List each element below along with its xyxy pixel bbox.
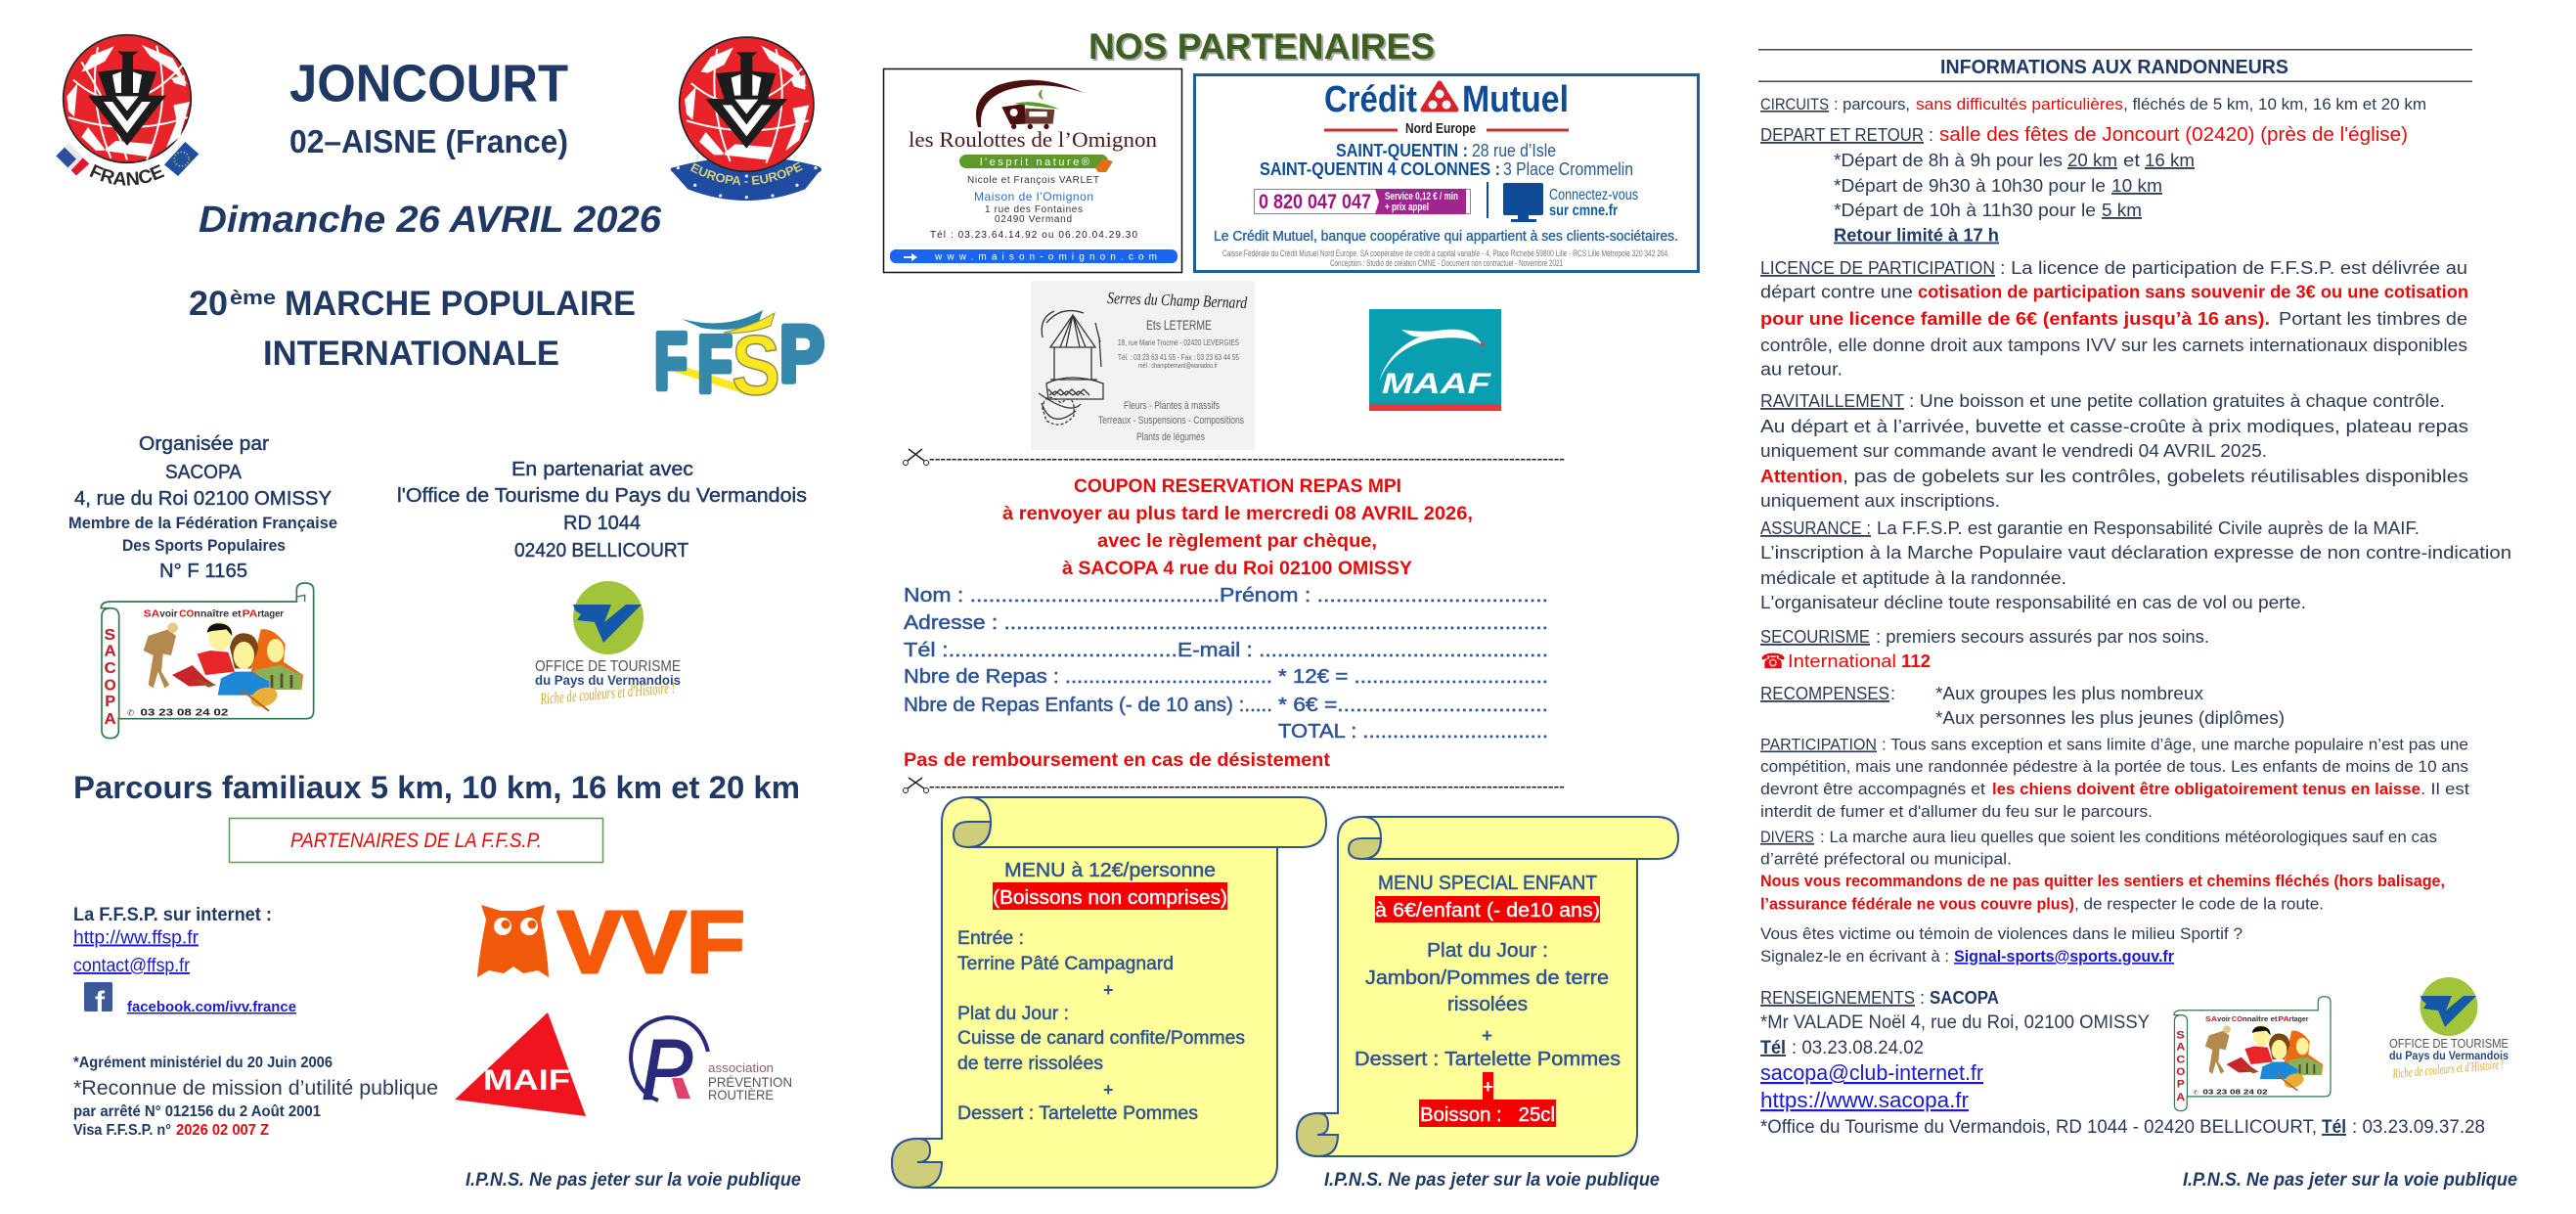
text block: start and return: *Départ de 10h à 11h30 pour le: [1834, 200, 2096, 220]
card: Serres du Champ Bernard: Serres du Champ Bernard: [1107, 289, 1248, 312]
panel: child menu scroll: MENU SPECIAL ENFANT: [1378, 873, 1597, 894]
icon: FFSP logo: [654, 310, 824, 413]
text block: start and return: DEPART ET RETOUR: [1760, 125, 1924, 145]
text block: start and return: 20 km: [2067, 150, 2117, 170]
text block: participation: devront être accompagnés et: [1760, 781, 1985, 798]
text block: FFSP online: La F.F.S.P. sur internet :: [73, 905, 272, 925]
text block: organiser: Organisée par: [139, 433, 269, 455]
text block: approvals: *Reconnue de mission d’utilité publique: [73, 1077, 438, 1100]
text block: tourist office partner: RD 1044: [563, 513, 641, 534]
card: Serres du Champ Bernard: Plants de légumes: [1136, 431, 1205, 443]
text block: start and return: 16 km: [2145, 150, 2195, 170]
form: coupon fields: Tél :....................................: [904, 640, 1177, 661]
text block: miscellaneous: [1760, 829, 2445, 914]
text block: insurance: ASSURANCE :: [1760, 518, 1871, 538]
text block: coupon heading: avec le règlement par chèque,: [1097, 531, 1377, 552]
card: Serres du Champ Bernard: Terreaux - Suspensions - Compositions: [1098, 415, 1244, 427]
text block: contact details: sacopa@club-internet.fr: [1760, 1060, 1983, 1085]
text block: insurance: L'organisateur décline toute responsabilité en cas de vol ou perte.: [1760, 593, 2306, 612]
icon: SACOPA logo: A: [105, 711, 116, 728]
text block: refreshments: Au départ et à l’arrivée, buvette et casse-croûte à prix modiques, plateau repas: [1760, 417, 2468, 436]
text block: tourist office partner: En partenariat avec: [511, 459, 693, 480]
icon: IVV Europe logo: EUROPA - EUROPE: [690, 162, 803, 186]
text block: start and return: [1760, 123, 2408, 245]
icon: small SACOPA logo: S: [2176, 1029, 2185, 1041]
panel: child menu scroll: Jambon/Pommes de terre: [1365, 967, 1609, 989]
text block: approvals: [73, 1055, 438, 1139]
icon: facebook: [84, 982, 112, 1018]
text block: organiser: Membre de la Fédération Française: [68, 514, 337, 532]
icon: scissors cut line bottom: ------------------------------------------------------------------------------------------------------------------: [929, 779, 1565, 793]
icon: gazebo sketch: [1039, 311, 1103, 425]
text block: refreshments: uniquement sur commande avant le vendredi 04 AVRIL 2025.: [1760, 441, 2267, 461]
card: Crédit Mutuel: Connectez-vous: [1549, 187, 1638, 203]
card: Les Roulottes de l'Omignon: les Roulottes de l’Omignon: [909, 127, 1157, 152]
text block: refreshments: RAVITAILLEMENT: [1760, 391, 1904, 411]
text block: participation: . Il est: [2421, 781, 2469, 798]
text block: first aid: [1760, 627, 2209, 673]
icon: small Office de Tourisme logo: OFFICE DE TOURISME: [2389, 1036, 2509, 1051]
text block: approvals: 2026 02 007 Z: [176, 1122, 269, 1139]
text block: participation: les chiens doivent être obligatoirement tenus en laisse: [1992, 781, 2421, 798]
icon: small Office de Tourisme logo: [2389, 977, 2509, 1082]
text block: violence reporting: Signal-sports@sports.gouv.fr: [1954, 948, 2175, 966]
card: Crédit Mutuel: Mutuel: [1462, 79, 1569, 120]
heading: our partners: NOS PARTENAIRES: [1090, 28, 1437, 68]
panel: child menu scroll: rissolées: [1447, 994, 1528, 1015]
text block: refreshments: [1760, 391, 2468, 511]
icon: small SACOPA logo: rtager: [2289, 1015, 2309, 1023]
text block: refreshments: , pas de gobelets sur les contrôles, gobelets réutilisables disponibles: [1843, 467, 2468, 486]
text block: insurance: [1760, 518, 2511, 612]
text block: participation licence: [1760, 258, 2468, 380]
card: Crédit Mutuel: Conception : Studio de création CMNE - Document non contractuel - Novembre 2021: [1330, 258, 1563, 268]
form: coupon fields: Prénom : .....................................: [1220, 585, 1548, 607]
card: Crédit Mutuel: Crédit: [1324, 79, 1417, 120]
text block: participation licence: LICENCE DE PARTICIPATION: [1760, 258, 1995, 278]
text block: FFSP online: http://ww.ffsp.fr: [73, 927, 200, 949]
icon: small SACOPA logo: ✆: [2194, 1089, 2198, 1096]
form: coupon fields: Adresse : ........................................................................................: [904, 612, 1548, 634]
card: Les Roulottes de l'Omignon: Nicole et François VARLET: [967, 175, 1099, 186]
text block: contact details: *Office du Tourisme du Vermandois, RD 1044 - 02420 BELLICOURT,: [1760, 1117, 2317, 1138]
card: Crédit Mutuel: Caisse Fédérale du Crédit Mutuel Nord Europe, SA coopérative de crédit à capital variable - 4, Place Richebé 59800 Lille - RCS Lille Métropole 320 342 264.: [1222, 248, 1669, 258]
text block: coupon heading: à SACOPA 4 rue du Roi 02100 OMISSY: [1062, 559, 1412, 579]
text block: start and return: 5 km: [2102, 200, 2142, 220]
icon: SACOPA logo: rtager: [257, 609, 284, 620]
text block: rewards: :: [1890, 684, 1895, 703]
heading: information: INFORMATIONS AUX RANDONNEURS: [1940, 57, 2288, 78]
card: Les Roulottes de l'Omignon: www.maison-omignon.com: [934, 252, 1157, 262]
text block: contact details: *Mr VALADE Noël 4, rue du Roi, 02100 OMISSY: [1760, 1012, 2150, 1033]
icon: Prévention Routière logo: P: [642, 1023, 692, 1117]
text block: miscellaneous: , de respecter le code de la route.: [2074, 896, 2324, 914]
heading: event name: INTERNATIONALE: [263, 335, 559, 373]
text block: rewards: *Aux personnes les plus jeunes (diplômes): [1935, 708, 2285, 728]
panel: adult menu scroll: [892, 797, 1326, 1188]
icon: IVV France logo: FRANCE: [90, 164, 164, 186]
icon: MAIF logo: MAIF: [483, 1064, 570, 1097]
text block: coupon heading: COUPON RESERVATION REPAS MPI: [1074, 476, 1401, 497]
text block: participation licence: pour une licence famille de 6€ (enfants jusqu’à 16 ans).: [1760, 308, 2270, 329]
text block: participation: interdit de fumer et d'allumer du feu sur le parcours.: [1760, 803, 2153, 821]
card: Serres du Champ Bernard: Tél. : 03 23 63 41 55 - Fax : 03 23 63 44 55: [1118, 353, 1239, 362]
text block: start and return: 10 km: [2111, 175, 2162, 196]
icon: small SACOPA logo: O: [2176, 1066, 2185, 1078]
icon: Office de Tourisme logo: Riche de couleurs et d'Histoire !: [539, 678, 676, 708]
text block: start and return: *Départ de 8h à 9h pour les: [1834, 150, 2063, 170]
text block: rewards: *Aux groupes les plus nombreux: [1935, 684, 2203, 703]
callout: FFSP partners: PARTENAIRES DE LA F.F.S.P.: [290, 830, 542, 852]
icon: Crédit Mutuel triangle: [1423, 83, 1456, 110]
text block: start and return: Retour limité à 17 h: [1834, 225, 1999, 245]
panel: adult menu scroll: (Boissons non comprises): [993, 887, 1227, 909]
icon: VVF logo: VVF: [557, 894, 745, 992]
text block: start and return: salle des fêtes de Joncourt (02420) (près de l'église): [1939, 123, 2408, 146]
panel: child menu scroll: +: [1483, 1077, 1493, 1097]
icon: scissors cut line top: [904, 449, 1565, 466]
heading: event name: ème: [230, 288, 276, 309]
icon: small Office de Tourisme logo: Riche de couleurs et d'Histoire !: [2391, 1057, 2505, 1082]
icon: FFSP logo: F: [697, 320, 733, 409]
footer note: left: I.P.N.S. Ne pas jeter sur la voie publique: [466, 1170, 801, 1191]
icon: SACOPA logo: ✆: [127, 707, 134, 717]
icon: FFSP logo: S: [732, 319, 780, 413]
icon: SACOPA logo: A: [105, 644, 116, 660]
text block: tourist office partner: l'Office de Tourisme du Pays du Vermandois: [397, 485, 807, 507]
card: Crédit Mutuel: Service 0,12 € / min: [1385, 191, 1458, 202]
text block: circuits: CIRCUITS: [1760, 96, 1829, 113]
footer note: right: I.P.N.S. Ne pas jeter sur la voie publique: [2183, 1170, 2517, 1191]
text block: miscellaneous: : La marche aura lieu quelles que soient les conditions météorologiques sauf en cas: [1820, 829, 2437, 846]
icon: Prévention Routière logo: association: [708, 1060, 774, 1075]
text block: contact details: Tél: [1760, 1038, 1786, 1058]
icon: small SACOPA logo: SA: [2205, 1015, 2217, 1023]
card: Serres du Champ Bernard: Ets LETERME: [1146, 317, 1212, 333]
card: Crédit Mutuel: 0 820 047 047: [1259, 191, 1371, 213]
text block: violence reporting: Signalez-le en écrivant à :: [1760, 948, 1949, 966]
panel: child menu scroll: [1297, 817, 1678, 1156]
text block: rewards: RECOMPENSES: [1760, 684, 1889, 703]
text block: start and return: et: [2123, 150, 2140, 170]
text block: miscellaneous: l’assurance fédérale ne vous couvre plus): [1760, 896, 2074, 914]
text block: refreshments: uniquement aux inscriptions.: [1760, 491, 2000, 511]
text block: organiser: Des Sports Populaires: [122, 536, 286, 555]
card: Les Roulottes de l'Omignon: l'esprit nature®: [980, 157, 1089, 168]
subtitle: department: 02–AISNE (France): [289, 123, 568, 159]
text block: violence reporting: [1760, 925, 2243, 966]
icon: small SACOPA logo: [2174, 997, 2331, 1111]
icon: small SACOPA logo: A: [2176, 1042, 2185, 1054]
text block: approvals: par arrêté N° 012156 du 2 Août 2001: [73, 1103, 321, 1120]
panel: adult menu scroll: Entrée :: [957, 928, 1024, 949]
icon: Office de Tourisme logo: [535, 581, 681, 708]
icon: VVF logo: [477, 894, 745, 992]
icon: Prévention Routière logo: [631, 1017, 792, 1117]
panel: walker information: [1758, 49, 2517, 1191]
panel: child menu scroll: Dessert : Tartelette Pommes: [1355, 1049, 1621, 1070]
panel: adult menu scroll: Plat du Jour :: [957, 1004, 1069, 1024]
icon: small SACOPA logo: A: [2176, 1092, 2185, 1103]
text block: FFSP online: [73, 905, 296, 1018]
text block: circuits: sans difficultés particulières: [1916, 96, 2123, 113]
icon: SACOPA logo: voir: [159, 609, 178, 620]
icon: butterfly: [1095, 158, 1113, 172]
icon: facebook: f: [95, 986, 106, 1018]
text block: participation licence: : La licence de participation de F.F.S.P. est délivrée au: [2000, 258, 2467, 278]
text block: miscellaneous: Nous vous recommandons de ne pas quitter les sentiers et chemins fléchés (hors balisage,: [1760, 873, 2445, 890]
icon: Office de Tourisme logo: OFFICE DE TOURISME: [535, 658, 681, 675]
text block: insurance: L’inscription à la Marche Populaire vaut déclaration expresse de non contre-indication: [1760, 543, 2511, 562]
text block: first aid: : premiers secours assurés par nos soins.: [1876, 627, 2209, 647]
callout: FFSP partners: [229, 818, 602, 863]
icon: MAAF logo: MAAF: [1382, 368, 1491, 400]
panel: adult menu scroll: MENU à 12€/personne: [1004, 860, 1216, 881]
icon: small SACOPA logo: PA: [2278, 1015, 2289, 1023]
card: Crédit Mutuel: sur cmne.fr: [1549, 202, 1618, 219]
text block: violence reporting: Vous êtes victime ou témoin de violences dans le milieu Sportif ?: [1760, 925, 2243, 943]
icon: SACOPA logo: nnaître et: [194, 609, 243, 620]
icon: Prévention Routière logo: PRÉVENTION: [708, 1074, 792, 1090]
card: Crédit Mutuel: SAINT-QUENTIN :: [1336, 141, 1468, 160]
icon: Office de Tourisme logo: du Pays du Vermandois: [535, 672, 681, 688]
panel: adult menu scroll: Terrine Pâté Campagnard: [957, 954, 1174, 974]
card: Crédit Mutuel: 28 rue d’Isle: [1472, 141, 1556, 160]
title: Joncourt: JONCOURT: [289, 55, 568, 113]
text block: contact details: Tél: [2322, 1117, 2346, 1138]
card: Crédit Mutuel: [1195, 74, 1698, 272]
card: Serres du Champ Bernard: Fleurs - Plantes à massifs: [1124, 400, 1220, 412]
text block: participation: [1760, 736, 2469, 821]
text block: contact details: [1760, 988, 2485, 1138]
footer note: middle: I.P.N.S. Ne pas jeter sur la voie publique: [1324, 1170, 1660, 1191]
icon: IVV France logo: [56, 33, 200, 186]
text block: participation licence: cotisation de participation sans souvenir de 3€ ou une cotisation: [1918, 282, 2468, 301]
icon: gypsy caravan: [976, 80, 1084, 129]
text block: coupon heading: [1002, 476, 1473, 579]
card: Les Roulottes de l'Omignon: 02490 Vermand: [995, 214, 1072, 225]
icon: small Office de Tourisme logo: du Pays du Vermandois: [2389, 1051, 2509, 1062]
panel: adult menu scroll: de terre rissolées: [957, 1054, 1103, 1074]
text block: participation licence: départ contre une: [1760, 282, 1913, 301]
icon: SACOPA logo: CO: [179, 609, 195, 620]
form: coupon fields: Nbre de Repas : ...................................: [904, 666, 1272, 688]
text block: approvals: Visa F.F.S.P. n°: [73, 1122, 171, 1139]
icon: telephone: ☎: [1760, 650, 1786, 673]
icon: SACOPA logo: P: [105, 694, 115, 710]
text block: contact details: : 03.23.09.37.28: [2352, 1117, 2485, 1138]
icon: SACOPA logo: 03 23 08 24 02: [140, 708, 229, 719]
text block: tourist office partner: 02420 BELLICOURT: [514, 540, 688, 562]
form: coupon fields: E-mail : ...............................................: [1177, 640, 1548, 661]
heading: event name: MARCHE POPULAIRE: [285, 285, 636, 323]
form: coupon fields: [904, 585, 1548, 742]
text block: insurance: La F.F.S.P. est garantie en Responsabilité Civile auprès de la MAIF.: [1877, 518, 2420, 538]
card: Crédit Mutuel: 3 Place Crommelin: [1503, 159, 1633, 179]
text block: contact details: SACOPA: [1930, 988, 1999, 1008]
note: no refund: Pas de remboursement en cas de désistement: [904, 750, 1331, 771]
card: Les Roulottes de l'Omignon: 1 rue des Fontaines: [985, 204, 1083, 215]
text block: organiser: N° F 1165: [159, 561, 247, 582]
icon: MAIF logo: [455, 1012, 586, 1116]
text block: participation licence: au retour.: [1760, 360, 1843, 380]
text block: contact details: RENSEIGNEMENTS: [1760, 988, 1915, 1008]
text block: circuits: , fléchés de 5 km, 10 km, 16 km et 20 km: [2123, 96, 2426, 113]
text block: organiser: 4, rue du Roi 02100 OMISSY: [74, 488, 332, 510]
card: Crédit Mutuel: + prix appel: [1385, 202, 1429, 213]
panel: partners and meal coupon: [884, 26, 1698, 1191]
text block: approvals: *Agrément ministériel du 20 Juin 2006: [73, 1055, 333, 1071]
card: Crédit Mutuel: Le Crédit Mutuel, banque coopérative qui appartient à ses clients-sociétaires.: [1214, 228, 1678, 245]
text block: organiser: SACOPA: [165, 462, 243, 483]
panel: adult menu scroll: +: [1103, 980, 1114, 1000]
text block: start and return: *Départ de 9h30 à 10h30 pour le: [1834, 175, 2106, 196]
icon: FFSP logo: P: [779, 310, 824, 399]
text block: tourist office partner: [397, 459, 807, 562]
icon: small SACOPA logo: C: [2176, 1054, 2185, 1065]
text block: rewards: [1760, 684, 2285, 728]
icon: small SACOPA logo: nnaître et: [2243, 1015, 2278, 1023]
text block: participation: compétition, mais une randonnée pédestre à la portée de tous. Les enfants de moins de 10 ans: [1760, 758, 2468, 776]
form: coupon fields: * 6€ =..................................: [1278, 695, 1548, 716]
text block: contact details: : 03.23.08.24.02: [1792, 1038, 1924, 1058]
icon: SACOPA logo: O: [105, 677, 116, 694]
card: Les Roulottes de l'Omignon: Maison de l’Omignon: [974, 190, 1093, 203]
text block: circuits: : parcours,: [1834, 96, 1910, 113]
icon: small SACOPA logo: voir: [2217, 1015, 2231, 1023]
icon: SACOPA logo: S: [105, 627, 115, 644]
form: coupon fields: Nbre de Repas Enfants (- de 10 ans) :.....: [904, 695, 1272, 716]
text block: participation: PARTICIPATION: [1760, 736, 1877, 753]
icon: MAAF logo: [1369, 309, 1501, 411]
panel: child menu scroll: Boisson : 25cl: [1420, 1104, 1555, 1126]
icon: SACOPA logo: C: [105, 660, 116, 677]
icon: SACOPA logo: PA: [243, 609, 257, 620]
form: coupon fields: * 12€ = ................................: [1278, 666, 1548, 688]
icon: SACOPA logo: [101, 583, 314, 739]
icon: scissors cut line top: ------------------------------------------------------------------------------------------------------------------: [929, 451, 1565, 466]
text block: participation licence: contrôle, elle donne droit aux tampons IVV sur les carnets internationaux disponibles: [1760, 336, 2467, 355]
icon: Prévention Routière logo: ROUTIÈRE: [708, 1087, 774, 1102]
text block: FFSP online: contact@ffsp.fr: [73, 956, 191, 976]
panel: child menu scroll: à 6€/enfant (- de10 ans): [1375, 900, 1600, 922]
text block: contact details: https://www.sacopa.fr: [1760, 1088, 1969, 1112]
text block: first aid: SECOURISME: [1760, 627, 1870, 647]
text block: coupon heading: à renvoyer au plus tard le mercredi 08 AVRIL 2026,: [1002, 504, 1473, 524]
icon: FFSP logo: F: [654, 317, 688, 406]
heading: event name: [189, 285, 636, 373]
date: Dimanche 26 AVRIL 2026: [199, 200, 662, 241]
text block: first aid: International: [1788, 652, 1896, 671]
text block: start and return: :: [1929, 125, 1933, 145]
icon: small SACOPA logo: 03 23 08 24 02: [2202, 1088, 2268, 1097]
heading: event name: 20: [189, 285, 228, 323]
card: Crédit Mutuel: Nord Europe: [1405, 120, 1476, 137]
card: Serres du Champ Bernard: 18, rue Marie Trocmé - 02420 LEVERGIES: [1118, 338, 1239, 347]
icon: small SACOPA logo: P: [2177, 1079, 2185, 1091]
icon: small SACOPA logo: CO: [2232, 1015, 2243, 1023]
card: Les Roulottes de l'Omignon: Tél : 03.23.64.14.92 ou 06.20.04.29.30: [930, 230, 1137, 241]
form: coupon fields: Nom : ........................................: [904, 585, 1220, 607]
panel: left event information: [56, 33, 825, 1191]
card: Les Roulottes de l'Omignon: [884, 68, 1181, 272]
panel: adult menu scroll: Dessert : Tartelette Pommes: [957, 1103, 1198, 1124]
text block: refreshments: : Une boisson et une petite collation gratuites à chaque contrôle.: [1909, 391, 2445, 411]
text block: participation: : Tous sans exception et sans limite d’âge, une marche populaire n’est pas une: [1882, 736, 2468, 753]
panel: child menu scroll: Plat du Jour :: [1427, 940, 1548, 962]
text block: participation licence: Portant les timbres de: [2279, 309, 2467, 329]
icon: IVV Europe logo: [671, 36, 822, 201]
panel: child menu scroll: +: [1482, 1026, 1492, 1047]
card: Serres du Champ Bernard: [1031, 281, 1255, 450]
text block: contact details: :: [1920, 988, 1925, 1008]
card: Crédit Mutuel: SAINT-QUENTIN 4 COLONNES :: [1260, 159, 1500, 179]
text block: circuits: [1760, 96, 2426, 113]
text block: refreshments: Attention: [1760, 467, 1843, 486]
text block: miscellaneous: DIVERS: [1760, 829, 1814, 846]
text block: miscellaneous: d’arrêté préfectoral ou municipal.: [1760, 851, 2012, 869]
form: coupon fields: TOTAL : ...............................: [1278, 721, 1548, 742]
text block: insurance: médicale et aptitude à la randonnée.: [1760, 568, 2066, 588]
card: Serres du Champ Bernard: mél : champbernard@wanadoo.fr: [1138, 363, 1219, 370]
heading: routes: Parcours familiaux 5 km, 10 km, 16 km et 20 km: [73, 770, 800, 805]
text block: first aid: 112: [1901, 652, 1931, 671]
icon: monitor: [1503, 183, 1543, 222]
icon: SACOPA logo: SA: [144, 609, 159, 620]
panel: adult menu scroll: +: [1103, 1080, 1114, 1100]
icon: scissors cut line bottom: [904, 778, 1565, 793]
panel: adult menu scroll: Cuisse de canard confite/Pommes: [957, 1028, 1245, 1049]
heading: our partners: NOS PARTENAIRES: [1088, 26, 1435, 67]
text block: organiser: [68, 433, 337, 582]
text block: FFSP online: facebook.com/ivv.france: [127, 999, 296, 1015]
